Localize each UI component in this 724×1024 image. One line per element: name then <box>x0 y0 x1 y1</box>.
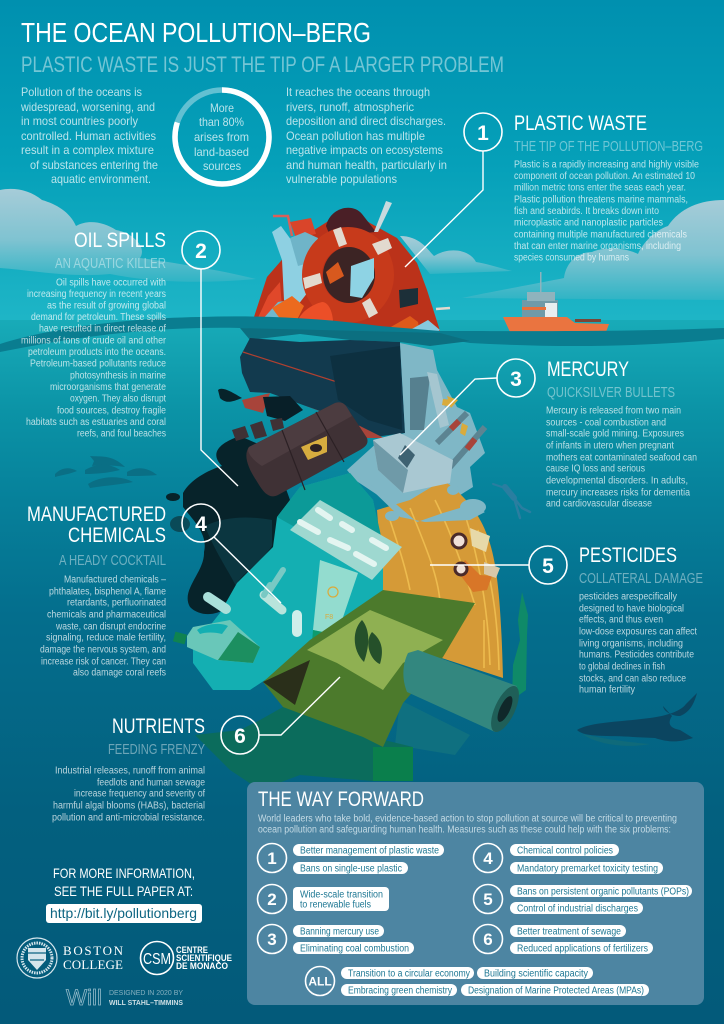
callout 3: mercury: 3 <box>510 368 522 391</box>
bottle <box>173 620 260 663</box>
callout 3: mercury: mothers eat contaminated seafood can <box>546 452 697 464</box>
logo: Boston College <box>17 938 124 978</box>
bright seaweed block <box>373 747 413 781</box>
cloud: left <box>0 189 256 282</box>
callout 5: pesticides: humans. Pesticides contribute <box>579 650 694 660</box>
platform power plant <box>373 433 453 493</box>
right straw <box>436 308 450 309</box>
intro right text: rivers, runoff, atmospheric <box>286 100 414 114</box>
callout 1: plastic waste: Plastic pollution threatens marine mammals, <box>514 194 688 206</box>
measure 2: Wide-scale transition <box>300 890 383 900</box>
spill splash <box>218 389 242 402</box>
callout 4: manufactured chemicals: waste, can disrupt endocrine <box>55 622 166 632</box>
light crate <box>410 320 440 337</box>
callout 2: oil spills: oxygen. They also disrupt <box>70 394 166 404</box>
callout 3: mercury: and cardiovascular disease <box>546 498 652 510</box>
background sea <box>0 320 724 1024</box>
measures for all: Embracing green chemistry <box>348 986 452 996</box>
life ring <box>312 237 384 313</box>
measure 5: Control of industrial discharges <box>517 904 638 914</box>
outfall pipe <box>403 650 525 736</box>
callout 4: manufactured chemicals: signaling, reduce male fertility, <box>46 632 166 644</box>
callout 4: manufactured chemicals: damage the nervous system, and <box>40 644 166 656</box>
callout 1: plastic waste: that can enter marine organisms, including <box>514 241 681 252</box>
title: THE OCEAN POLLUTION–BERG <box>21 17 371 48</box>
platform puddle <box>347 470 486 522</box>
measure 1: Bans on single-use plastic <box>300 864 402 874</box>
measure 5 <box>474 884 692 914</box>
oil barrel <box>232 402 368 496</box>
measure 6: Better treatment of sewage <box>517 926 621 938</box>
pipe shadow <box>395 700 470 755</box>
diver <box>493 484 530 518</box>
callout 2: oil spills: OIL SPILLS <box>74 229 166 252</box>
more information block <box>46 865 202 923</box>
measures for all: ALL <box>308 974 332 988</box>
barrel logo <box>301 436 327 460</box>
logo: Centre Scientifique de Monaco: DE MONACO <box>176 961 228 971</box>
left bag <box>256 282 283 322</box>
intro right text: Ocean pollution has multiple <box>286 129 425 143</box>
callout 2: oil spills: habitats such as estuaries and coral <box>26 417 166 428</box>
measure 3 <box>258 924 414 954</box>
callout 5: pesticides: pesticides arespecifically <box>579 592 677 602</box>
measure 4: 4 <box>483 849 493 868</box>
callout 4: manufactured chemicals <box>27 503 281 678</box>
capsules <box>264 595 282 610</box>
designer credit <box>66 985 183 1010</box>
callout 3: mercury: Mercury is released from two main <box>546 406 681 416</box>
callout 3: mercury: cause IQ loss and serious <box>546 464 645 474</box>
sunscreen tube <box>312 560 358 643</box>
callout 2: oil spills: Petroleum-based pollutants reduce <box>30 358 166 370</box>
intro left text: aquatic environment. <box>51 172 151 186</box>
sunscreen tube: F8 <box>325 614 333 621</box>
callout 5: pesticides: designed to have biological <box>579 604 684 614</box>
callout 3: mercury: QUICKSILVER BULLETS <box>547 384 675 401</box>
black case <box>399 288 418 308</box>
callout 3: mercury: sources - coal combustion and <box>546 418 666 428</box>
measure 6: 6 <box>483 930 493 949</box>
logo: Boston College: COLLEGE <box>63 957 123 972</box>
deck block <box>427 372 449 428</box>
callout 6: nutrients <box>52 677 340 824</box>
orange float <box>296 302 333 330</box>
designer credit: Will <box>66 985 102 1010</box>
nutrient pillow <box>263 590 475 747</box>
measure 1: Better management of plastic waste <box>300 846 439 856</box>
callout 2: oil spills: food sources, destroy fragile <box>57 406 166 416</box>
measures for all: Designation of Marine Protected Areas (MPAs) <box>468 986 644 996</box>
callout 3: mercury: of infants in utero when pregnant <box>546 440 674 452</box>
more information block: SEE THE FULL PAPER AT: <box>54 883 193 899</box>
measure 3: Eliminating coal combustion <box>300 944 409 954</box>
callout 6: nutrients: FEEDING FRENZY <box>108 741 205 758</box>
more information block: http://bit.ly/pollutionberg <box>50 905 197 921</box>
callout 5: pesticides: 5 <box>542 555 554 578</box>
gold bars <box>442 396 468 436</box>
callout 2: oil spills: photosynthesis in marine <box>70 370 166 382</box>
measures for all <box>306 966 649 996</box>
panel: the way forward <box>247 782 704 1005</box>
callout 4: manufactured chemicals: A HEADY COCKTAIL <box>59 552 166 569</box>
straw <box>273 216 292 236</box>
small cans <box>232 418 284 441</box>
cloud: right <box>462 200 724 300</box>
panel intro: World leaders who take bold, evidence-based action to stop pollution at source will be critical to preventing <box>258 814 677 824</box>
donut: more than 80% <box>175 90 269 184</box>
logo: Centre Scientifique de Monaco <box>140 942 232 974</box>
measure 6: Reduced applications of fertilizers <box>517 944 648 954</box>
callout 6: nutrients: pollution and anti-microbial resistance. <box>52 812 205 824</box>
donut: more than 80%: sources <box>203 159 241 173</box>
callout 6: nutrients: harmful algal blooms (HABs), bacterial <box>53 800 205 812</box>
cloud: behind heap <box>400 236 512 274</box>
measure 1 <box>258 844 444 874</box>
callout 6: nutrients: feedlots and human sewage <box>97 778 205 788</box>
intro left text: of substances entering the <box>30 158 158 172</box>
donut: more than 80%: arises from <box>194 130 249 144</box>
callout 2: oil spills: millions of tons of crude oil and other <box>21 336 167 346</box>
callout 5: pesticides: to global declines in fish <box>579 662 665 672</box>
illustration: plastic waste heap <box>253 201 450 337</box>
dark band cap <box>240 328 470 346</box>
more information block: FOR MORE INFORMATION, <box>53 865 195 881</box>
oil drops <box>166 493 190 532</box>
callout 3: mercury: MERCURY <box>547 358 629 381</box>
red box <box>290 218 316 238</box>
intro right text: and human health, particularly in <box>286 158 447 172</box>
intro left text: in most countries poorly <box>21 114 138 128</box>
callout 4: manufactured chemicals: 4 <box>195 513 207 536</box>
intro right text: negative impacts on ecosystems <box>286 143 443 157</box>
measure 2: 2 <box>267 890 277 909</box>
designer credit: DESIGNED IN 2020 BY <box>109 990 183 997</box>
callout 6: nutrients: Industrial releases, runoff from animal <box>55 766 205 776</box>
oil platform <box>347 343 485 520</box>
intro left text: widespread, worsening, and <box>20 100 155 114</box>
callout 2: oil spills: have resulted in direct release of <box>39 324 166 334</box>
oil spill <box>183 436 290 614</box>
callout 2: oil spills: petroleum products into the oceans. <box>28 347 166 358</box>
callout 1: plastic waste: species consumed by humans <box>514 252 629 264</box>
callout 1: plastic waste <box>405 112 703 267</box>
donut: more than 80%: land-based <box>194 145 249 159</box>
whale <box>577 693 697 746</box>
callout 2: oil spills: Oil spills have occurred with <box>56 278 166 288</box>
leaf <box>355 620 382 664</box>
chimney stripes <box>451 421 475 449</box>
background sky <box>0 0 724 325</box>
callout 1: plastic waste: component of ocean pollution. An estimated 10 <box>514 171 695 182</box>
measure 4: Mandatory premarket toxicity testing <box>517 864 658 874</box>
callout 4: manufactured chemicals: Manufactured chemicals – <box>64 574 166 586</box>
designer credit: WILL STAHL–TIMMINS <box>109 1000 183 1007</box>
panel intro: ocean pollution and safeguarding human health. Measures such as these could help with the six problems: <box>258 824 671 836</box>
callout 6: nutrients: NUTRIENTS <box>112 715 205 738</box>
intro right text: vulnerable populations <box>286 172 397 186</box>
callout 5: pesticides: low-dose exposures can affect <box>579 626 697 638</box>
measure 4 <box>474 844 663 874</box>
dark bag <box>326 208 376 236</box>
orange crate <box>382 316 420 334</box>
callout 4: manufactured chemicals: retardants, perfluorinated <box>67 598 166 608</box>
callout 6: nutrients: 6 <box>234 725 246 748</box>
callout 3: mercury <box>400 358 697 510</box>
callout 5: pesticides <box>430 544 703 696</box>
callout 2: oil spills <box>21 229 238 486</box>
intro right text: deposition and direct discharges. <box>286 114 446 128</box>
callout 3: mercury: small-scale gold mining. Exposures <box>546 428 684 440</box>
intro left text: result in a complex mixture <box>21 143 154 157</box>
lattice tower <box>410 376 430 430</box>
callout 2: oil spills: demand for petroleum. These spills <box>31 312 166 323</box>
callout 6: nutrients: increase frequency and severity of <box>74 788 205 800</box>
callout 4: manufactured chemicals: chemicals and pharmaceutical <box>47 610 166 620</box>
callout 2: oil spills: 2 <box>195 240 207 263</box>
logo: Centre Scientifique de Monaco: CENTRE <box>176 945 208 955</box>
blister pack <box>290 500 402 580</box>
measure 3: 3 <box>267 930 277 949</box>
callout 1: plastic waste: 1 <box>477 122 489 145</box>
callout 2: oil spills: increasing frequency in recent years <box>27 289 166 300</box>
callout 4: manufactured chemicals: CHEMICALS <box>68 524 166 547</box>
callout 4: manufactured chemicals: MANUFACTURED <box>27 503 166 526</box>
tractor <box>452 528 500 592</box>
right seaweed <box>512 592 528 700</box>
callout 3: mercury: developmental disorders. In adults, <box>546 476 688 486</box>
callout 4: manufactured chemicals: increase risk of cancer. They can <box>41 656 166 668</box>
intro left text: Pollution of the oceans is <box>21 85 142 99</box>
callout 1: plastic waste: million metric tons enter the seas each year. <box>514 182 686 194</box>
measure 5: Bans on persistent organic pollutants (POPs) <box>517 886 689 898</box>
sunken ship <box>240 338 405 438</box>
callout 1: plastic waste: PLASTIC WASTE <box>514 112 647 135</box>
intro left text <box>20 85 158 186</box>
callout 5: pesticides: living organisms, including <box>579 638 683 650</box>
subtitle: PLASTIC WASTE IS JUST THE TIP OF A LARGER PROBLEM <box>21 52 504 77</box>
chimneys <box>437 413 485 467</box>
orange net box <box>272 296 304 324</box>
bottle <box>272 226 308 310</box>
pesticide field <box>377 480 503 678</box>
callout 5: pesticides: stocks, and can also reduce <box>579 674 686 684</box>
measures for all: Building scientific capacity <box>484 968 588 980</box>
measure 5: 5 <box>483 890 493 909</box>
water surface band <box>0 316 724 352</box>
measure 4: Chemical control policies <box>517 846 613 856</box>
logo: Centre Scientifique de Monaco: CSM <box>143 951 171 968</box>
callout 5: pesticides: PESTICIDES <box>579 544 677 567</box>
callout 4: manufactured chemicals: also damage coral reefs <box>73 668 166 678</box>
panel intro <box>258 814 677 836</box>
callout 2: oil spills: microorganisms that generate <box>50 382 166 393</box>
measure 1: 1 <box>267 849 277 868</box>
donut: more than 80%: than 80% <box>199 115 244 129</box>
measure 3: Banning mercury use <box>300 926 379 938</box>
inside ring <box>323 247 375 303</box>
donut: more than 80%: More <box>210 101 234 115</box>
measures for all: Transition to a circular economy <box>348 968 470 980</box>
measure 6 <box>474 924 653 954</box>
logo: Centre Scientifique de Monaco: SCIENTIFIQUE <box>176 953 232 963</box>
callout 1: plastic waste: microplastic and nanoplastic particles <box>514 218 663 228</box>
intro right text: It reaches the oceans through <box>286 85 430 99</box>
callout 3: mercury: mercury increases risks for dementia <box>546 488 690 498</box>
seaweed <box>195 700 413 790</box>
callout 4: manufactured chemicals: phthalates, bisphenol A, flame <box>49 586 166 598</box>
toothbrush <box>374 201 392 232</box>
callout 5: pesticides: human fertility <box>579 684 635 696</box>
callout 2: oil spills: reefs, and foul beaches <box>77 428 166 440</box>
callout 2: oil spills: AN AQUATIC KILLER <box>55 255 166 272</box>
measure 2 <box>258 884 389 914</box>
intro left text: controlled. Human activities <box>21 129 156 143</box>
panel heading: THE WAY FORWARD <box>258 788 424 811</box>
callout 1: plastic waste: containing multiple manufactured chemicals <box>514 230 687 240</box>
callout 5: pesticides: effects, and thus even <box>579 614 663 626</box>
intro right text <box>286 85 447 186</box>
logo: Boston College: BOSTON <box>63 943 124 958</box>
callout 1: plastic waste: fish and seabirds. It breaks down into <box>514 206 659 217</box>
measure 2: to renewable fuels <box>300 900 371 910</box>
chemical pool <box>173 473 402 690</box>
callout 1: plastic waste: Plastic is a rapidly increasing and highly visible <box>514 160 699 170</box>
dolphins <box>55 456 157 488</box>
callout 2: oil spills: as the result of growing global <box>47 300 166 312</box>
ship on the horizon <box>503 272 609 332</box>
